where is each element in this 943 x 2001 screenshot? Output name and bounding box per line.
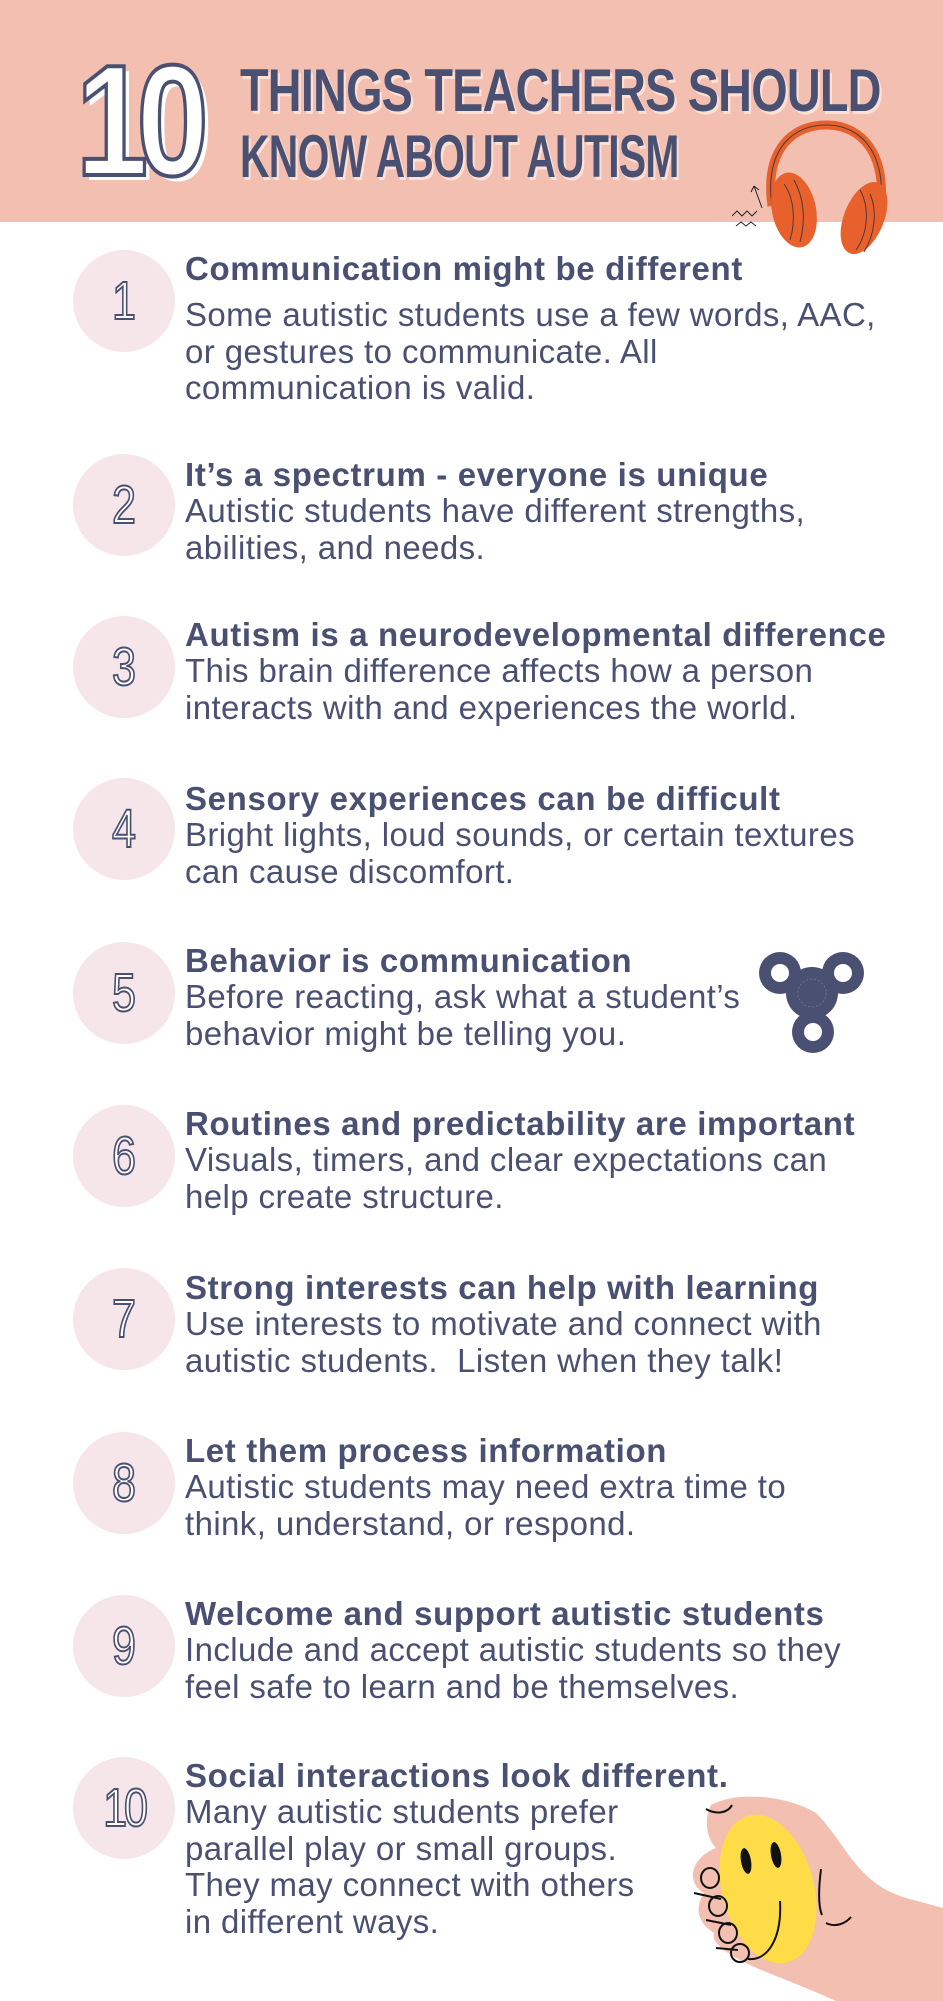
text 4 [185,780,855,890]
icon: fidget spinner [759,952,864,1053]
title line 2: KNOW ABOUT AUTISM [240,123,679,190]
number badge 2 [73,454,175,556]
icon: hand squeezing smiley stress ball [693,1796,943,2001]
text 1: Communication might be different [185,250,743,287]
item 3 [73,616,886,726]
text 7: autistic students. Listen when they talk! [185,1342,783,1378]
number badge 5 [73,942,175,1044]
item 6 [73,1105,855,1215]
number badge 8: 8 [112,1453,136,1513]
text 1: Some autistic students use a few words, AAC, [185,296,876,333]
text 10: They may connect with others [185,1866,635,1903]
text 9: Include and accept autistic students so they [185,1631,841,1668]
number badge 1: 1 [112,271,136,331]
text 7 [185,1269,822,1379]
text 10 [185,1757,729,1940]
text 4: Bright lights, loud sounds, or certain textures [185,816,855,853]
text 6: help create structure. [185,1178,504,1214]
number badge 4 [73,778,175,880]
text 6 [185,1105,855,1215]
text 2: abilities, and needs. [185,528,485,566]
text 10: Many autistic students prefer [185,1793,618,1830]
text 1 [185,250,876,406]
item 1 [73,250,876,406]
text 2 [185,456,805,566]
number badge 10: 10 [103,1778,145,1838]
text 6: Visuals, timers, and clear expectations can [185,1141,827,1178]
text 9 [185,1595,841,1704]
text 8: Autistic students may need extra time to [185,1468,786,1505]
text 7: Use interests to motivate and connect with [185,1305,822,1342]
text 8: think, understand, or respond. [185,1504,635,1542]
text 10: parallel play or small groups. [185,1830,617,1866]
number badge 9: 9 [112,1616,136,1676]
number badge 4: 4 [112,799,136,859]
text 3 [185,616,886,726]
text 10: Social interactions look different. [185,1757,729,1794]
text 2: It’s a spectrum - everyone is unique [185,456,768,493]
text 3: This brain difference affects how a person [185,652,813,689]
text 10: in different ways. [185,1902,439,1940]
text 5: Behavior is communication [185,942,632,979]
title line 1: THINGS TEACHERS SHOULD [240,57,881,124]
text 4: can cause discomfort. [185,852,514,890]
text 1: communication is valid. [185,369,535,406]
number badge 7 [73,1268,175,1370]
number badge 3: 3 [112,637,136,697]
number badge 2: 2 [112,475,136,535]
text 8 [185,1432,786,1542]
number badge 10 [73,1757,175,1859]
number badge 6 [73,1105,175,1207]
text 9: feel safe to learn and be themselves. [185,1668,739,1704]
text 3: interacts with and experiences the world. [185,688,798,726]
number badge 9 [73,1595,175,1697]
number badge 7: 7 [112,1289,136,1349]
item 4 [73,778,855,890]
text 6: Routines and predictability are important [185,1105,855,1142]
text 8: Let them process information [185,1432,667,1469]
number badge 3 [73,616,175,718]
number badge 1 [73,250,175,352]
text 5 [185,942,740,1052]
number badge 6: 6 [112,1126,136,1186]
title: big 10: 10 [76,33,197,209]
item 10 [73,1757,729,1940]
number badge 8 [73,1432,175,1534]
text 4: Sensory experiences can be difficult [185,780,781,817]
item 8 [73,1432,786,1542]
header band [0,0,943,222]
text 3: Autism is a neurodevelopmental difference [185,616,886,653]
icon: headphones [732,120,888,254]
item 5 [73,942,740,1052]
text 5: Before reacting, ask what a student’s [185,978,740,1015]
item 7 [73,1268,822,1379]
item 2 [73,454,805,566]
text 7: Strong interests can help with learning [185,1269,819,1306]
text 2: Autistic students have different strengths, [185,492,805,529]
text 9: Welcome and support autistic students [185,1595,825,1632]
number badge 5: 5 [112,963,136,1023]
text 1: or gestures to communicate. All [185,332,658,370]
text 5: behavior might be telling you. [185,1014,626,1052]
item 9 [73,1595,841,1704]
